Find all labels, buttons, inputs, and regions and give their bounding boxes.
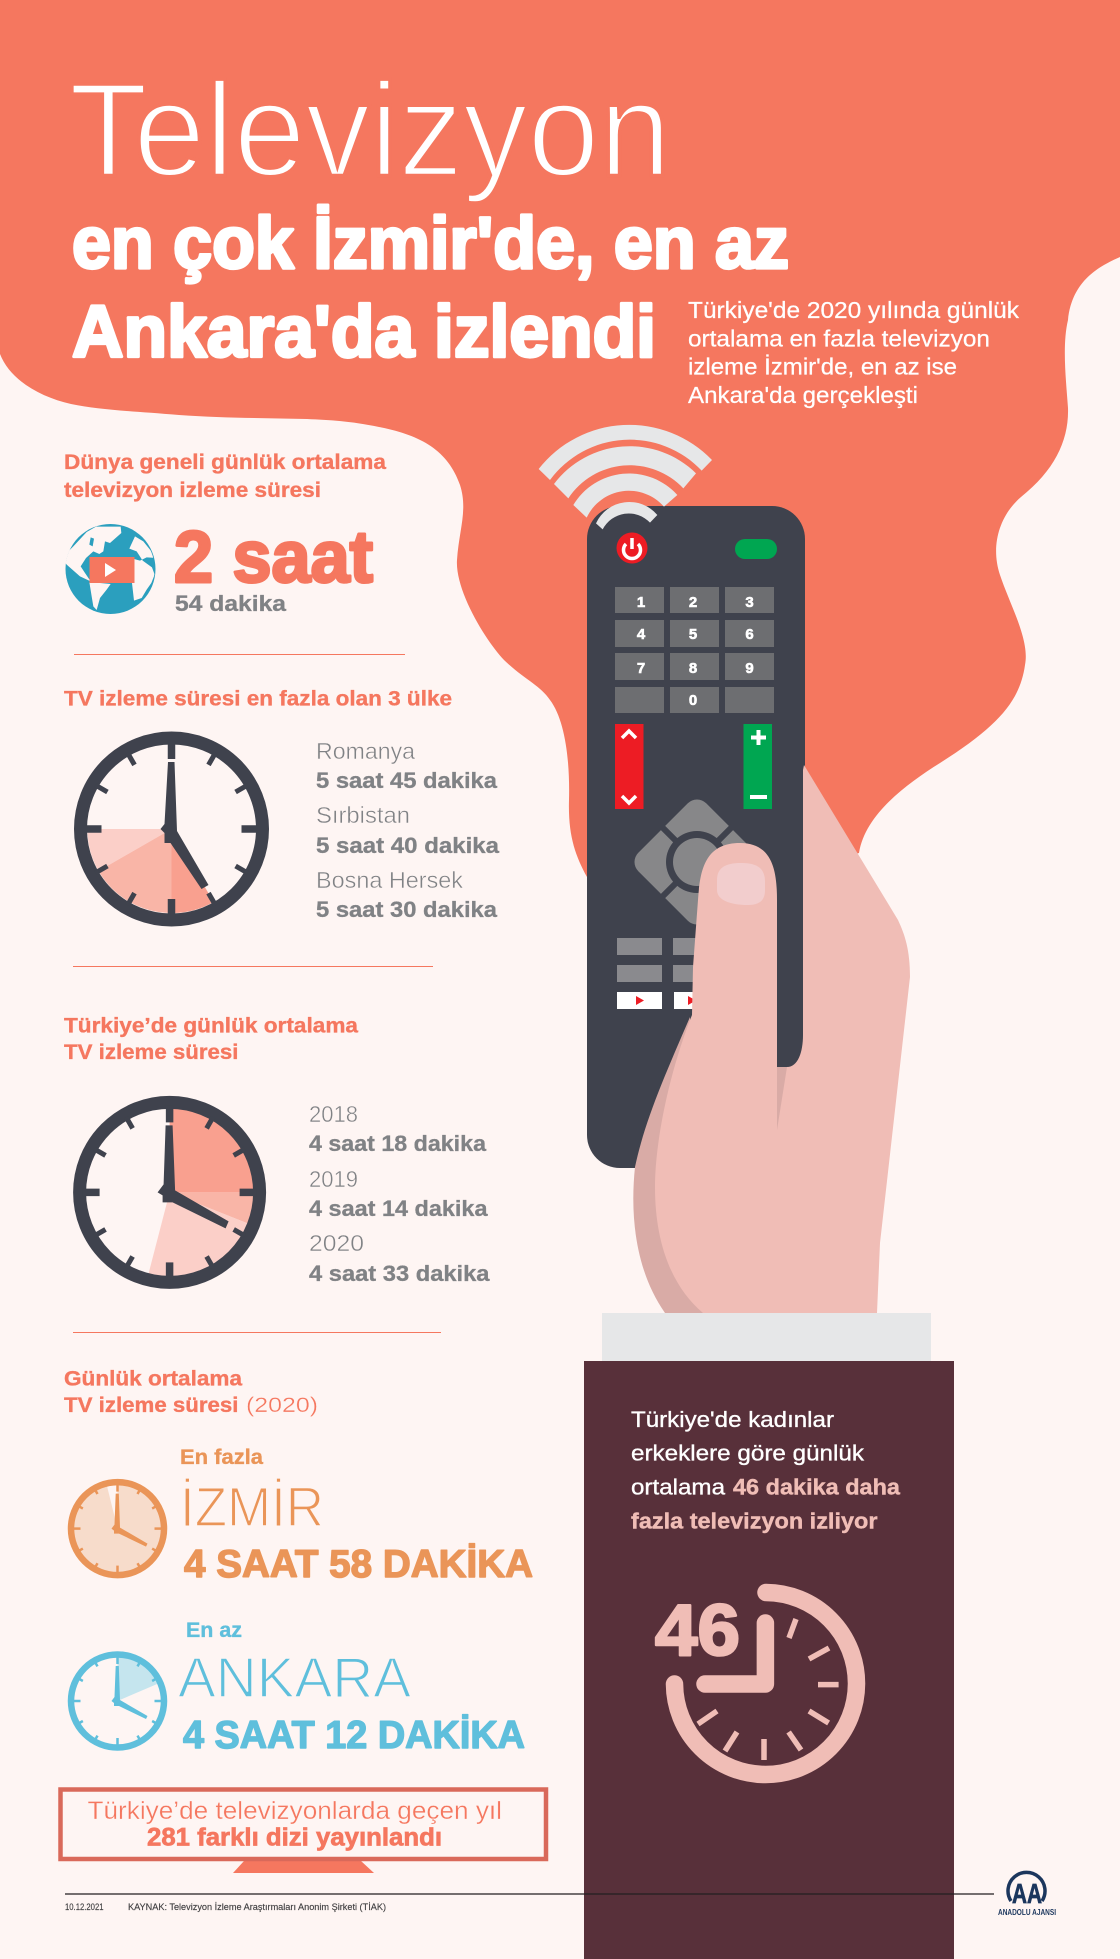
list: countries: 5 saat 30 dakika xyxy=(316,897,498,922)
frame of the TV xyxy=(60,1790,546,1859)
icon: clock with wedges 5:45 xyxy=(80,738,262,920)
heading: cities 2020: TV izleme süresi xyxy=(64,1394,238,1417)
title line: Televizyon: Televizyon xyxy=(69,56,671,204)
heading: cities 2020: (2020) xyxy=(246,1394,318,1417)
panel text: ortalama xyxy=(631,1474,726,1500)
number keypad: 9 xyxy=(745,660,754,677)
shirt cuff xyxy=(602,1313,931,1361)
number keypad xyxy=(615,587,774,713)
date: 10.12.2021 xyxy=(65,1902,104,1913)
stand of the TV xyxy=(233,1861,374,1873)
list: years: 4 saat 18 dakika xyxy=(309,1131,487,1156)
power button xyxy=(616,532,648,564)
callout text line 2: 281 farklı dizi yayınlandı xyxy=(147,1824,442,1852)
number keypad: 2 xyxy=(689,594,697,611)
number keypad: 1 xyxy=(637,594,645,611)
list: years: 2018 xyxy=(309,1101,358,1127)
footer xyxy=(65,1872,1056,1917)
icon: clock with wedges 4:20 xyxy=(80,1102,260,1282)
value: 4 saat 12 dakika: 4 SAAT 12 DAKİKA xyxy=(183,1714,525,1757)
number keypad: 3 xyxy=(745,594,754,611)
icon: orange clock xyxy=(70,1482,164,1576)
logo: Anadolu Ajansı: ANADOLU AJANSI xyxy=(998,1907,1056,1917)
remote control body xyxy=(587,506,805,1168)
icon: 46 minute clock: 46 xyxy=(655,1591,740,1671)
callout text line 1: Türkiye’de televizyonlarda geçen yıl xyxy=(88,1797,502,1825)
intro text: izleme İzmir'de, en az ise xyxy=(688,354,957,380)
list: years: 2019 xyxy=(309,1166,358,1192)
number keypad: 5 xyxy=(689,626,697,643)
lower buttons xyxy=(617,938,719,1009)
number keypad: 8 xyxy=(689,660,697,677)
intro text: Ankara'da gerçekleşti xyxy=(688,382,918,408)
heading: Turkey daily average xyxy=(64,1014,358,1064)
list: countries: Bosna Hersek xyxy=(316,867,463,893)
value: 54 dakika: 54 dakika xyxy=(175,591,287,616)
city: İZMİR: İZMİR xyxy=(180,1475,324,1538)
logo: Anadolu Ajansı xyxy=(998,1872,1056,1917)
heading: Turkey daily average: TV izleme süresi xyxy=(64,1041,238,1064)
volume rocker xyxy=(744,724,772,809)
heading: Turkey daily average: Türkiye’de günlük ortalama xyxy=(64,1014,358,1038)
heading: world average: Dünya geneli günlük ortalama xyxy=(64,451,386,474)
thumb nail xyxy=(717,863,765,905)
intro text xyxy=(688,297,1020,408)
number keypad: 7 xyxy=(637,660,645,677)
value: 4 saat 58 dakika: 4 SAAT 58 DAKİKA xyxy=(184,1543,533,1586)
section: Turkey daily average xyxy=(64,1014,490,1286)
callout: TV-shaped box xyxy=(60,1790,546,1873)
section: cities 2020 xyxy=(64,1368,533,1757)
finger fold xyxy=(777,1067,787,1130)
logo: Anadolu Ajansı: AA xyxy=(1012,1878,1042,1909)
label: En fazla: En fazla xyxy=(180,1446,263,1469)
signal arcs xyxy=(539,425,712,529)
green button xyxy=(735,539,777,559)
label: En az: En az xyxy=(186,1619,242,1642)
heading: top 3 countries: TV izleme süresi en fazla olan 3 ülke xyxy=(64,688,452,710)
list: countries xyxy=(316,738,500,922)
list: years xyxy=(309,1101,490,1286)
panel text: fazla televizyon izliyor xyxy=(631,1508,878,1534)
sleeve background xyxy=(584,1361,954,1959)
title line: Ankara'da izlendi: Ankara'da izlendi xyxy=(72,292,656,372)
city: ANKARA: ANKARA xyxy=(178,1646,411,1710)
number keypad: 0 xyxy=(689,692,697,709)
title xyxy=(69,56,789,372)
icon: blue clock xyxy=(70,1654,164,1748)
intro text: Türkiye'de 2020 yılında günlük xyxy=(688,297,1020,323)
heading: cities 2020: Günlük ortalama xyxy=(64,1368,242,1390)
intro text: ortalama en fazla televizyon xyxy=(688,326,990,352)
heading: cities 2020 xyxy=(64,1368,318,1417)
heading: world average xyxy=(64,451,386,502)
direction pad xyxy=(626,791,768,933)
list: countries: Sırbistan xyxy=(316,802,410,828)
value: 2 saat: 2 saat xyxy=(174,517,373,598)
list: years: 4 saat 14 dakika xyxy=(309,1196,488,1221)
title line: en çok İzmir'de, en az: en çok İzmir'de, en az xyxy=(72,203,789,284)
heading: world average: televizyon izleme süresi xyxy=(64,479,321,502)
icon: globe with play button xyxy=(62,524,157,614)
list: countries: Romanya xyxy=(316,738,415,764)
icon: 46 minute clock xyxy=(655,1591,856,1774)
section: world average xyxy=(62,451,386,616)
panel: women vs men sleeve xyxy=(584,1361,954,1959)
coral background blob xyxy=(0,0,1120,885)
list: years: 4 saat 33 dakika xyxy=(309,1261,490,1286)
panel text: erkeklere göre günlük xyxy=(631,1440,865,1466)
panel text: 46 dakika daha xyxy=(733,1474,901,1500)
list: countries: 5 saat 45 dakika xyxy=(316,768,498,793)
list: years: 2020 xyxy=(309,1230,364,1256)
number keypad: 4 xyxy=(637,626,646,643)
section: top 3 countries xyxy=(64,688,500,922)
list: countries: 5 saat 40 dakika xyxy=(316,833,500,858)
hand shadow xyxy=(633,1017,710,1313)
hand and thumb xyxy=(655,765,910,1313)
source: KAYNAK: Televizyon İzleme Araştırmaları Anonim Şirketi (TİAK) xyxy=(128,1902,386,1913)
channel rocker xyxy=(615,724,644,809)
panel text: Türkiye'de kadınlar xyxy=(631,1407,834,1432)
illustration: hand holding remote xyxy=(539,425,931,1361)
number keypad: 6 xyxy=(745,626,754,643)
panel text xyxy=(631,1407,901,1534)
